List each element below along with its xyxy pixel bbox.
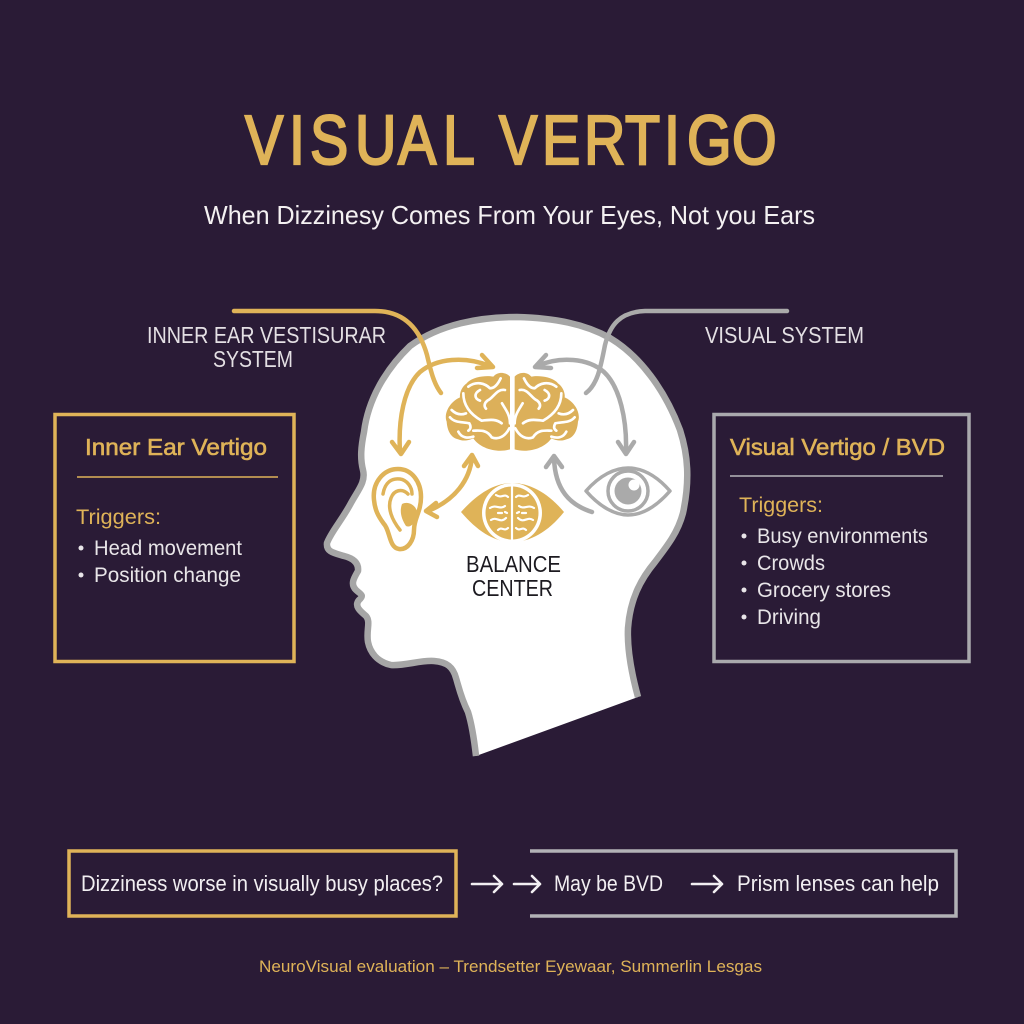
trigger list: Position change [94, 564, 241, 587]
callout: BVD and prism lenses: Prism lenses can help [737, 871, 939, 896]
arrow: brain to eye arc, gray [535, 355, 634, 454]
icon: balance center eye with brain [461, 483, 564, 543]
triggers label: Triggers: [739, 494, 823, 517]
arrow: inner ear path into brain [234, 311, 441, 393]
icon: eye [586, 468, 670, 515]
trigger list: Head movement [94, 537, 242, 560]
callout: BVD and prism lenses: May be BVD [554, 871, 663, 896]
arrow: eye to brain [546, 456, 592, 512]
heading: inner ear vertigo: Inner Ear Vertigo [85, 434, 267, 460]
heading: visual vertigo: Visual Vertigo / BVD [730, 434, 945, 460]
panel: visual vertigo / BVD [714, 414, 969, 662]
trigger list [742, 525, 928, 629]
head silhouette [327, 317, 687, 756]
label: inner ear system [147, 322, 386, 372]
icon: ear [374, 469, 421, 549]
subtitle: When Dizzinesy Comes From Your Eyes, Not you Ears [204, 200, 815, 230]
callout: dizziness question [69, 851, 456, 916]
trigger list: Busy environments [757, 525, 928, 548]
label: visual system: VISUAL SYSTEM [705, 322, 864, 348]
label: balance center: BALANCE [466, 551, 561, 577]
trigger list: Grocery stores [757, 579, 891, 602]
footer: NeuroVisual evaluation – Trendsetter Eyewaar, Summerlin Lesgas [259, 958, 762, 976]
label: balance center: CENTER [472, 575, 553, 601]
title: VISUAL VERTIGO [245, 101, 777, 179]
arrow: question to result [472, 876, 540, 892]
callout: dizziness question: Dizziness worse in visually busy places? [81, 871, 443, 896]
label: inner ear system: INNER EAR VESTISURAR [147, 322, 386, 348]
icon: brain [446, 373, 579, 451]
arrow: brain to ear arc, gold [392, 355, 493, 454]
label: balance center [466, 551, 561, 601]
arrow: ear and brain double arrow [426, 455, 478, 517]
trigger list: Driving [757, 606, 821, 629]
panel: inner ear vertigo [55, 414, 294, 662]
trigger list [78, 537, 242, 587]
callout: BVD and prism lenses [530, 851, 956, 916]
triggers label: Triggers: [76, 506, 161, 529]
arrow: BVD to prism lenses [692, 876, 722, 892]
trigger list: Crowds [757, 552, 825, 575]
arrow: visual system path into brain [586, 311, 787, 393]
label: inner ear system: SYSTEM [213, 346, 293, 372]
